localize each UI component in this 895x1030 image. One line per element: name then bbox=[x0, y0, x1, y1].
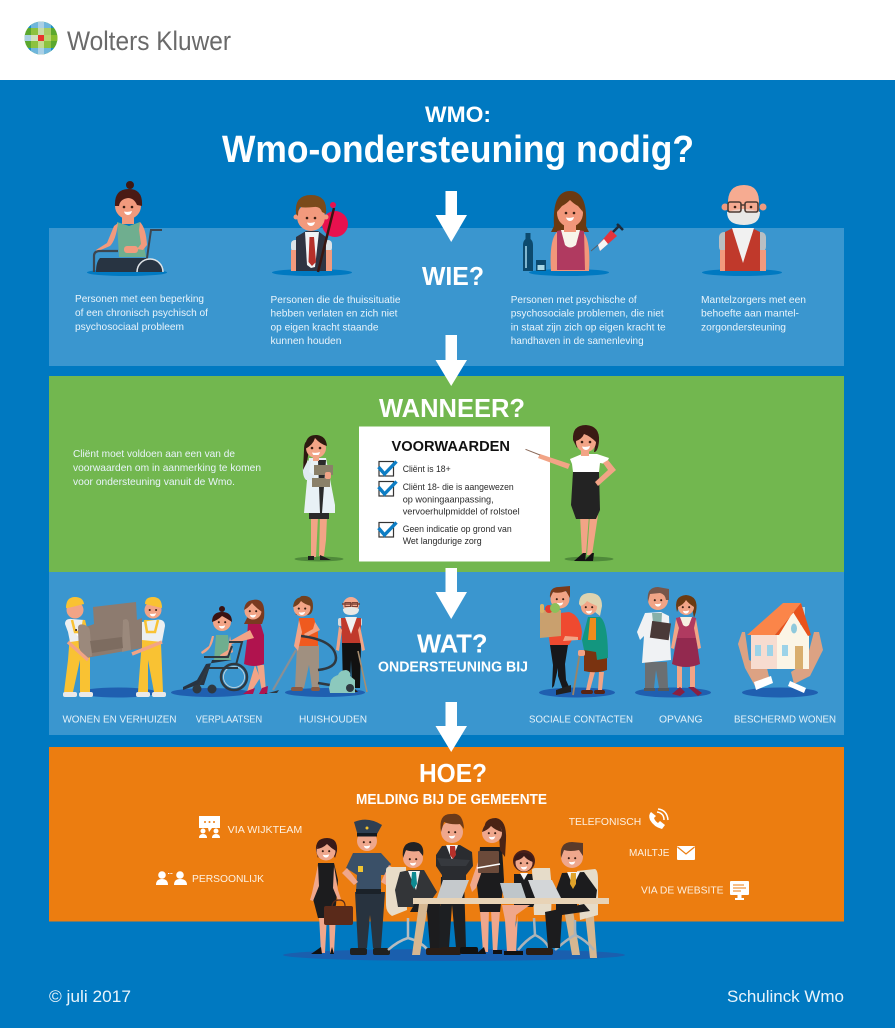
seated man, teal tie bbox=[386, 842, 447, 955]
condition 2 bbox=[403, 482, 520, 518]
text: informal caregivers: Mantelzorgers met een bbox=[701, 294, 806, 306]
condition 3: Geen indicatie op grond van bbox=[403, 524, 512, 535]
text: psychosocial problems bbox=[511, 294, 666, 347]
condition 3: Wet langdurige zorg bbox=[403, 536, 482, 547]
panel: HOE bbox=[49, 747, 844, 922]
police officer bbox=[342, 820, 393, 955]
contact: mailtje bbox=[629, 846, 695, 860]
text: persons with disability: Personen met een beperking bbox=[75, 293, 204, 305]
contact: via de website: VIA DE WEBSITE bbox=[641, 884, 724, 896]
text: informal caregivers bbox=[701, 294, 806, 334]
illustration: movers carrying sofa bbox=[63, 597, 166, 698]
contact: telefonisch: TELEFONISCH bbox=[569, 816, 641, 828]
woman with folder bbox=[470, 818, 506, 954]
text: informal caregivers: behoefte aan mantel- bbox=[701, 308, 799, 320]
illustration: municipal team at table bbox=[283, 814, 625, 961]
illustration: wheelchair user with helper bbox=[171, 600, 268, 697]
contact: via wijkteam bbox=[199, 816, 302, 838]
text: psychosocial problems: psychosociale problemen, die niet bbox=[511, 308, 664, 320]
label: verplaatsen: VERPLAATSEN bbox=[196, 714, 262, 726]
arrow 3 bbox=[436, 568, 467, 619]
label: huishouden: HUISHOUDEN bbox=[299, 714, 367, 726]
text: client conditions intro: voorwaarden om in aanmerking te komen bbox=[73, 462, 261, 474]
condition 2: vervoerhulpmiddel of rolstoel bbox=[403, 506, 520, 518]
heading: WANNEER: WANNEER? bbox=[379, 393, 525, 423]
logo: Wolters Kluwer: Wolters Kluwer bbox=[67, 26, 231, 56]
illustration: caregiver man with glasses bbox=[702, 185, 782, 276]
main title: Wmo-ondersteuning nodig? bbox=[222, 129, 694, 171]
contact: telefonisch bbox=[569, 809, 668, 829]
label: opvang: OPVANG bbox=[659, 714, 702, 726]
text: psychosocial problems: in staat zijn zich op eigen kracht te bbox=[511, 322, 666, 334]
small heading: WMO: WMO: bbox=[425, 102, 491, 127]
text: persons who left home: Personen die de thuissituatie bbox=[270, 294, 401, 306]
panel: WAT bbox=[49, 572, 844, 735]
text: client conditions intro bbox=[73, 448, 261, 488]
text: client conditions intro: Cliënt moet voldoen aan een van de bbox=[73, 448, 235, 460]
panel: WANNEER bbox=[49, 376, 844, 572]
text: persons with disability: of een chronisch psychisch of bbox=[75, 307, 208, 319]
checkbox 1 bbox=[378, 462, 396, 476]
card: voorwaarden bbox=[359, 426, 550, 562]
subheading: melding bij de gemeente: MELDING BIJ DE GEMEENTE bbox=[356, 792, 547, 808]
illustration: woman with bottle and syringe bbox=[523, 191, 623, 276]
seated woman bbox=[502, 850, 552, 955]
text: persons who left home bbox=[270, 294, 401, 347]
contact: via wijkteam: VIA WIJKTEAM bbox=[228, 824, 302, 836]
illustration: female doctor bbox=[294, 435, 344, 562]
laptops bbox=[437, 880, 561, 898]
heading: WAT: WAT? bbox=[417, 628, 488, 658]
arrow 2 bbox=[436, 335, 467, 386]
text: persons with disability bbox=[75, 293, 208, 333]
illustration: woman in wheelchair bbox=[87, 181, 167, 276]
contact: persoonlijk: PERSOONLIJK bbox=[192, 873, 264, 885]
table bbox=[412, 904, 597, 958]
text: persons who left home: hebben verlaten en zich niet bbox=[270, 308, 398, 320]
footer: source: Schulinck Wmo bbox=[727, 987, 844, 1006]
contact: via de website bbox=[641, 881, 749, 900]
label: beschermd wonen: BESCHERMD WONEN bbox=[734, 714, 836, 726]
condition 2: Cliënt 18- die is aangewezen bbox=[403, 482, 514, 493]
contact: mailtje: MAILTJE bbox=[629, 847, 670, 859]
text: persons with disability: psychosociaal probleem bbox=[75, 321, 184, 333]
text: persons who left home: op eigen kracht staande bbox=[270, 322, 379, 334]
illustration: doctor and girl bbox=[635, 587, 711, 698]
heading: HOE: HOE? bbox=[419, 758, 487, 788]
arrow 4 bbox=[436, 702, 467, 752]
illustration: boy with bundle bbox=[272, 195, 352, 276]
condition 2: op woningaanpassing, bbox=[403, 494, 494, 506]
illustration: female teacher pointing bbox=[526, 425, 616, 562]
woman with briefcase bbox=[310, 838, 353, 954]
checkbox 2 bbox=[378, 482, 396, 496]
arrow 1 bbox=[436, 191, 467, 242]
illustration: woman vacuuming and old man bbox=[265, 596, 367, 697]
logo: Wolters Kluwer bbox=[24, 21, 231, 56]
text: psychosocial problems: Personen met psychische of bbox=[511, 294, 637, 306]
subheading: ondersteuning bij: ONDERSTEUNING BIJ bbox=[378, 660, 528, 676]
footer: date: © juli 2017 bbox=[49, 987, 131, 1006]
condition 1: Cliënt is 18+ bbox=[403, 464, 451, 475]
text: psychosocial problems: handhaven in de samenleving bbox=[511, 335, 644, 347]
text: client conditions intro: voor ondersteuning vanuit de Wmo. bbox=[73, 476, 235, 488]
text: informal caregivers: zorgondersteuning bbox=[701, 322, 786, 334]
card heading: VOORWAARDEN bbox=[392, 439, 510, 455]
condition 3 bbox=[403, 524, 512, 547]
seated man, gold tie bbox=[526, 842, 598, 955]
illustration: hands holding house bbox=[738, 603, 823, 698]
label: wonen en verhuizen: WONEN EN VERHUIZEN bbox=[62, 714, 176, 726]
text: persons who left home: kunnen houden bbox=[270, 335, 342, 347]
checkbox 3 bbox=[378, 522, 396, 537]
team floor shadow bbox=[283, 949, 625, 961]
standing man, red tie bbox=[436, 814, 478, 955]
illustration: young man helping elderly woman bbox=[539, 586, 615, 698]
table top bbox=[413, 898, 609, 904]
label: sociale contacten: SOCIALE CONTACTEN bbox=[529, 714, 633, 726]
heading: WIE: WIE? bbox=[422, 261, 484, 291]
contact: persoonlijk bbox=[156, 871, 264, 885]
panel: WIE bbox=[49, 228, 844, 366]
